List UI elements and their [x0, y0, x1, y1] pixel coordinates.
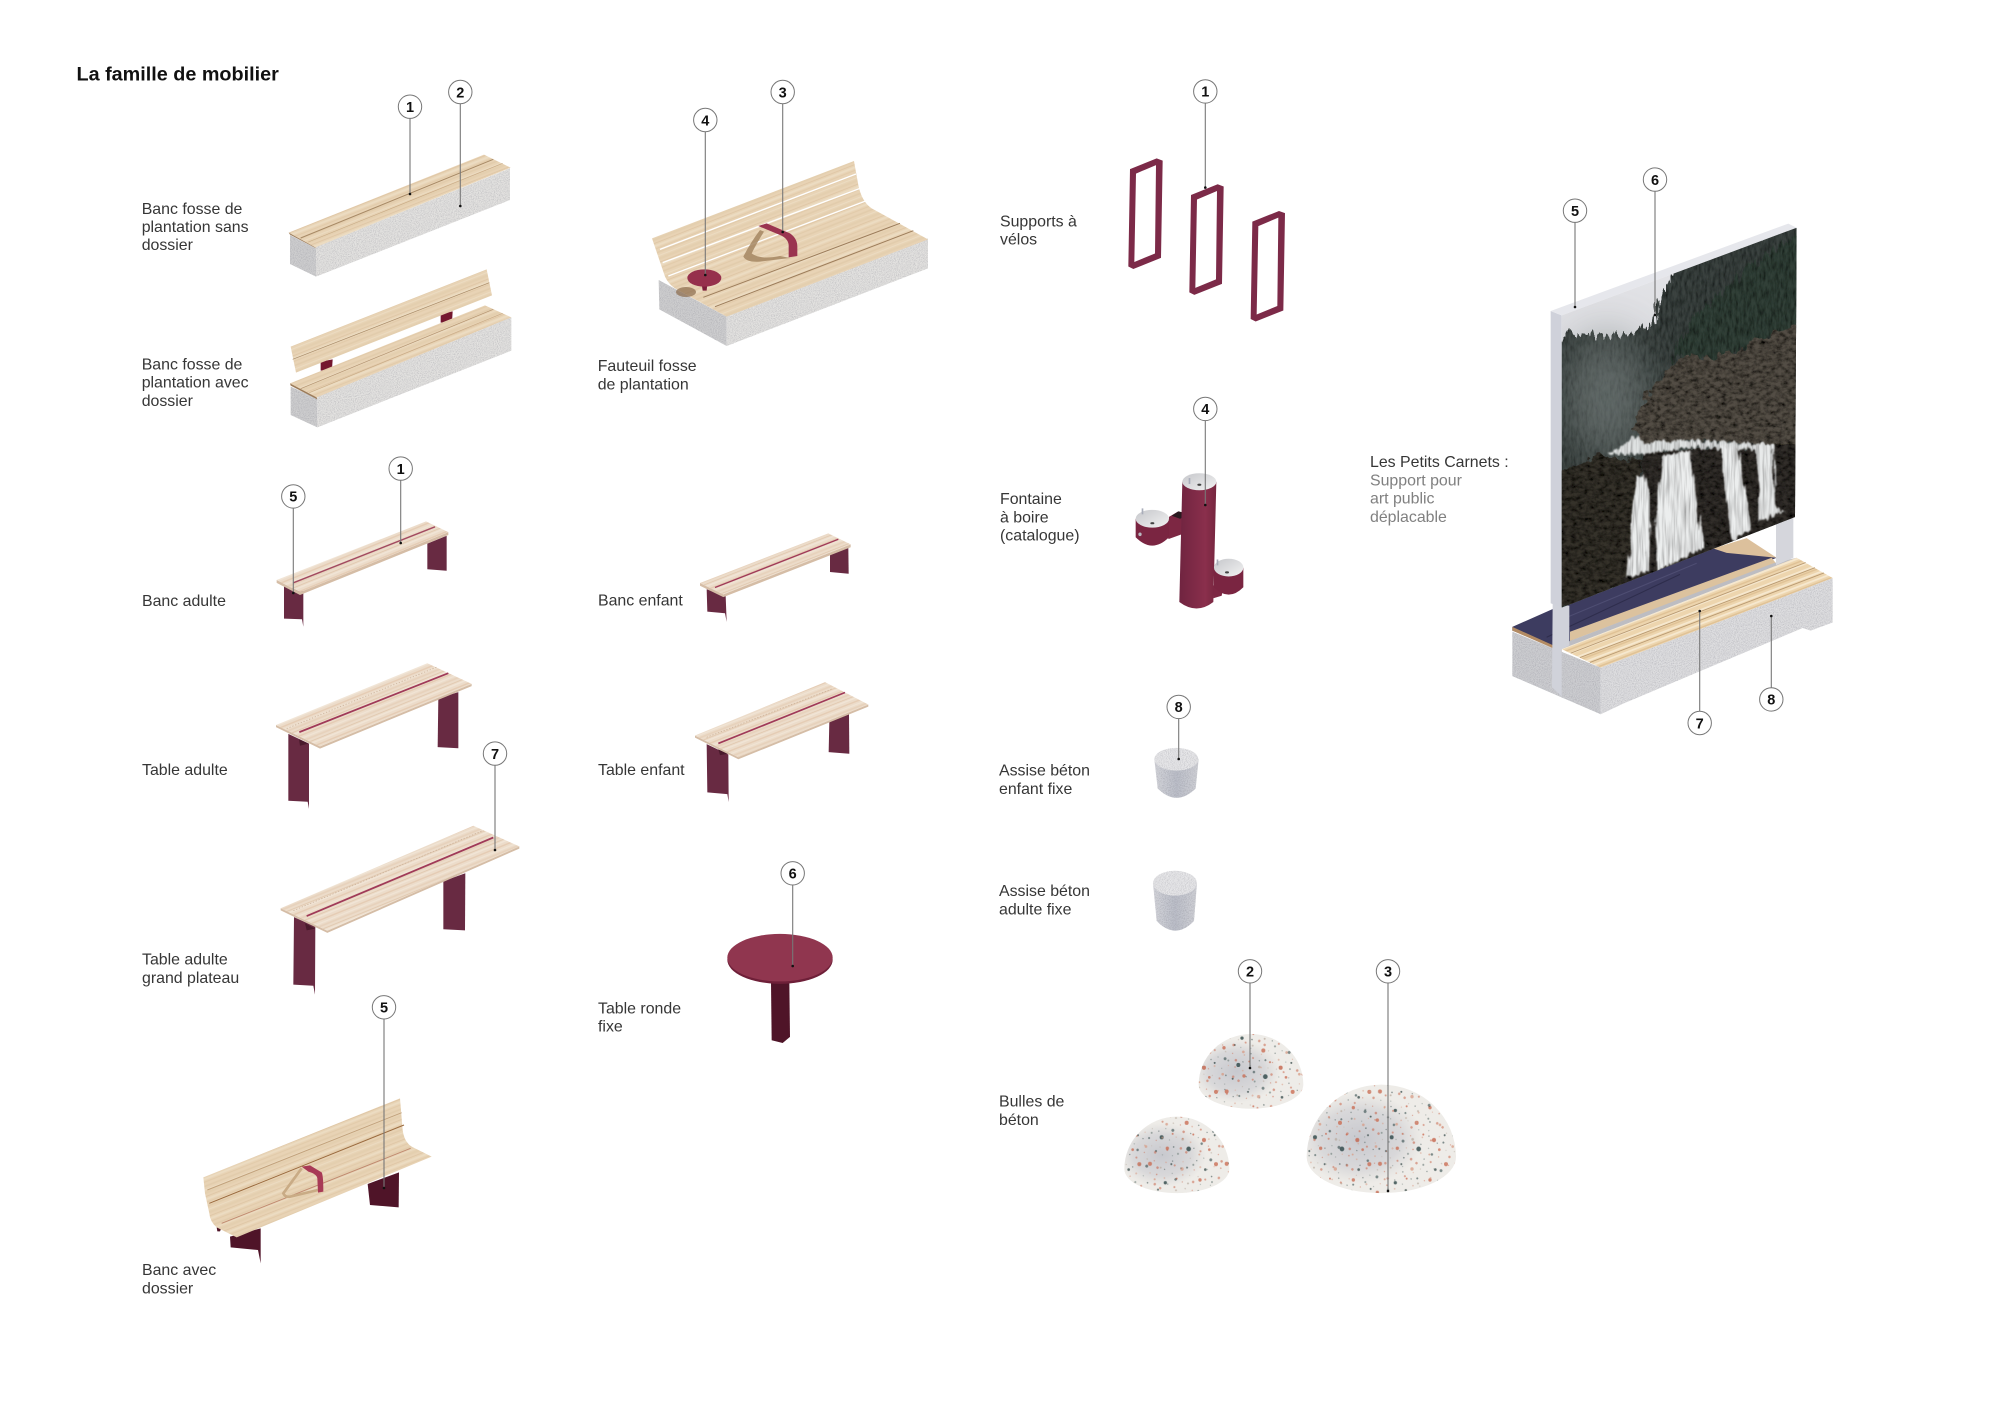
callout 2 — [449, 80, 472, 207]
label: assise beton adulte fixe: adulte fixe — [999, 901, 1072, 918]
label: table ronde fixe: Table ronde — [598, 1000, 681, 1017]
bench: banc avec dossier — [203, 1098, 432, 1263]
bench: fauteuil fosse de plantation — [652, 161, 928, 346]
label: banc adulte: Banc adulte — [142, 593, 226, 610]
drinking fountain — [1136, 473, 1243, 608]
label: fontaine a boire: à boire — [1000, 510, 1049, 526]
callout 7: 7 — [1696, 716, 1704, 732]
table: table enfant — [695, 682, 868, 802]
callout 6 — [781, 862, 804, 967]
callout 6: 6 — [1651, 173, 1659, 189]
callout 4 — [694, 108, 717, 276]
callout 1: 1 — [397, 462, 405, 478]
label: les petits carnets: art public — [1370, 491, 1435, 508]
label: les petits carnets: déplacable — [1370, 509, 1447, 526]
label: banc fosse avec dossier: plantation avec — [142, 374, 249, 392]
callout 2 — [1238, 960, 1262, 1069]
label: banc fosse sans dossier: plantation sans — [142, 219, 249, 236]
label: table adulte: Table adulte — [142, 762, 228, 779]
callout 3 — [771, 80, 794, 233]
callout 2: 2 — [456, 85, 464, 101]
label: assise beton enfant fixe: Assise béton — [999, 762, 1090, 780]
label: fontaine a boire: Fontaine — [1000, 491, 1062, 508]
bench: banc adulte — [277, 521, 448, 627]
callout 5 — [372, 996, 396, 1189]
callout 5: 5 — [1571, 204, 1579, 220]
bench: banc fosse avec dossier — [290, 269, 511, 427]
callout 1: 1 — [406, 100, 414, 116]
callout 1 — [398, 95, 422, 195]
label: table enfant: Table enfant — [598, 762, 685, 779]
label: banc fosse avec dossier: dossier — [142, 393, 194, 410]
label: fauteuil fosse de plantation: de plantation — [598, 376, 689, 394]
label: assise beton adulte fixe: Assise béton — [999, 883, 1090, 900]
callout 7 — [1688, 610, 1711, 735]
label: table adulte grand plateau: Table adulte — [142, 952, 228, 968]
label: les petits carnets: Support pour — [1370, 473, 1463, 490]
callout 1 — [1194, 80, 1217, 189]
table: table adulte grand plateau — [281, 826, 519, 995]
callout 1: 1 — [1201, 85, 1209, 101]
callout 4: 4 — [1201, 402, 1209, 418]
label: supports a velos: Supports à — [1000, 214, 1077, 230]
label: banc enfant: Banc enfant — [598, 593, 683, 610]
callout 6 — [1643, 168, 1667, 316]
callout 3: 3 — [779, 85, 787, 101]
callout 1 — [389, 457, 412, 544]
label: assise beton enfant fixe: enfant fixe — [999, 781, 1072, 798]
callout 3 — [1376, 960, 1400, 1192]
label: table ronde fixe: fixe — [598, 1019, 623, 1036]
label: banc avec dossier: dossier — [142, 1280, 194, 1297]
callout 8 — [1167, 695, 1190, 760]
label: banc avec dossier: Banc avec — [142, 1262, 216, 1279]
label: banc fosse sans dossier: Banc fosse de — [142, 201, 243, 218]
callout 8: 8 — [1767, 693, 1775, 709]
callout 4: 4 — [701, 113, 709, 129]
callout 8: 8 — [1175, 700, 1183, 716]
callout 5: 5 — [380, 1001, 388, 1017]
label: table adulte grand plateau: grand plateau — [142, 970, 239, 987]
label: banc fosse sans dossier: dossier — [142, 237, 194, 254]
callout 2: 2 — [1246, 965, 1254, 981]
callout 5: 5 — [289, 490, 297, 506]
callout 5 — [1563, 199, 1587, 308]
label: supports a velos: vélos — [1000, 232, 1037, 248]
table: table ronde fixe — [727, 934, 833, 1043]
bike racks — [1128, 158, 1285, 322]
label: bulles de beton: béton — [999, 1112, 1039, 1129]
table: table adulte — [276, 663, 472, 809]
label: banc fosse avec dossier: Banc fosse de — [142, 356, 243, 374]
label: bulles de beton: Bulles de — [999, 1093, 1065, 1110]
label: fauteuil fosse de plantation: Fauteuil fosse — [598, 358, 697, 375]
concrete seat: adulte — [1153, 871, 1197, 931]
callout 5 — [282, 485, 305, 594]
callout 4 — [1194, 397, 1217, 506]
concrete seat: enfant — [1154, 748, 1199, 798]
title: La famille de mobilier — [76, 64, 279, 86]
bench: banc fosse sans dossier — [289, 155, 511, 277]
concrete domes — [1124, 1034, 1456, 1193]
bench: banc enfant — [700, 533, 851, 622]
label: fontaine a boire: (catalogue) — [1000, 528, 1080, 544]
label: les petits carnets: Les Petits Carnets : — [1370, 454, 1509, 471]
callout 7 — [483, 742, 507, 851]
callout 7: 7 — [491, 747, 499, 763]
callout 6: 6 — [789, 867, 797, 883]
callout 8 — [1760, 615, 1783, 711]
art support: base, seats and photo panel — [1512, 215, 1833, 714]
callout 3: 3 — [1384, 965, 1392, 981]
